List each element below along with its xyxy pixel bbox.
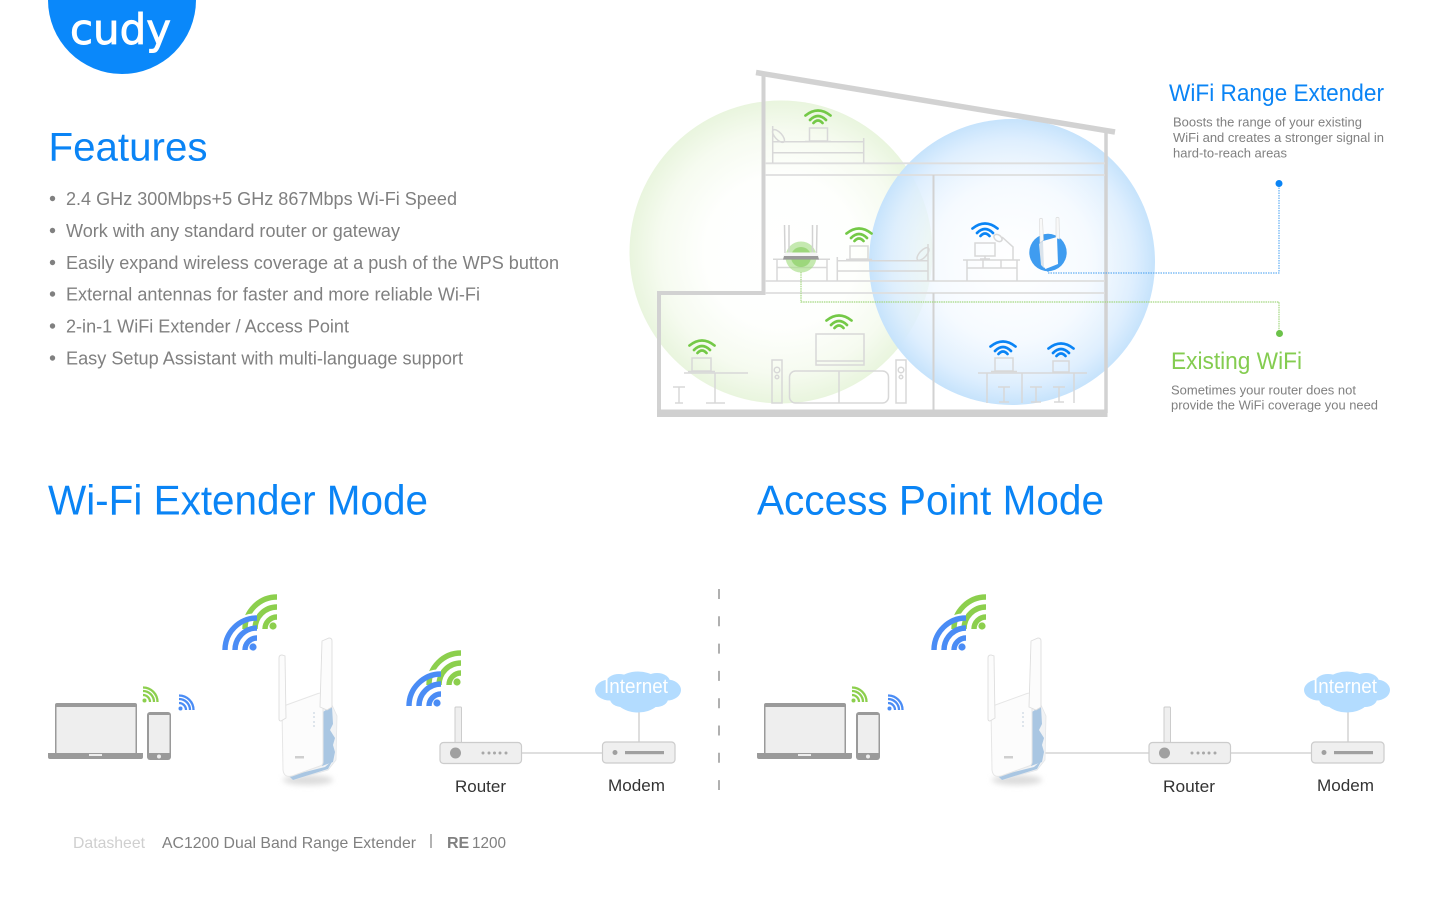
internet cloud: Internet <box>604 676 668 698</box>
lower-right tables and laptops <box>978 358 1087 403</box>
feature list: Easily expand wireless coverage at a push of the WPS button <box>66 252 559 273</box>
connector: router to label <box>801 272 1279 333</box>
router <box>1149 707 1230 764</box>
feature list: Easy Setup Assistant with multi-language support <box>66 348 463 368</box>
callout: WiFi Range Extender: hard-to-reach areas <box>1173 146 1287 160</box>
study desk with monitor and lamp <box>963 233 1020 281</box>
feature list <box>50 188 559 368</box>
callout: Existing WiFi: provide the WiFi coverage you need <box>1171 398 1378 412</box>
callout: Existing WiFi: Sometimes your router does not <box>1171 382 1356 398</box>
callout: Existing WiFi <box>1171 348 1378 412</box>
router on desk with green signal <box>783 225 819 272</box>
feature list: 2-in-1 WiFi Extender / Access Point <box>66 316 349 336</box>
internet cloud <box>1304 672 1390 712</box>
diagram: access point mode <box>757 597 1390 796</box>
logo: cudy <box>48 0 196 74</box>
label: Modem: Modem <box>1317 776 1374 795</box>
footer: Datasheet <box>73 835 146 852</box>
footer: AC1200 Dual Band Range Extender <box>162 835 417 852</box>
feature list: 2.4 GHz 300Mbps+5 GHz 867Mbps Wi-Fi Speed <box>66 188 457 209</box>
extender device <box>279 638 337 785</box>
label: Modem: Modem <box>608 776 665 795</box>
label: Router: Router <box>1163 777 1215 796</box>
heading: Wi-Fi Extender Mode: Wi-Fi Extender Mode <box>48 476 428 524</box>
client devices <box>757 688 902 760</box>
access point device <box>988 638 1046 785</box>
logo: cudy: cudy <box>70 5 171 54</box>
feature list: Work with any standard router or gateway <box>66 220 401 241</box>
internet cloud <box>595 672 681 712</box>
modem <box>602 710 675 763</box>
callout: WiFi Range Extender <box>1169 80 1384 160</box>
footer: 1200 <box>472 835 506 852</box>
wifi icon: study <box>972 224 998 236</box>
wifi icon: lower right one <box>990 342 1016 354</box>
callout: WiFi Range Extender: Boosts the range of your existing <box>1173 114 1362 130</box>
internet cloud: Internet <box>1313 676 1377 698</box>
extender coverage circle <box>869 119 1155 405</box>
middle bed and laptop <box>837 244 931 281</box>
connector: extender to label <box>1048 184 1279 273</box>
diagram: extender mode <box>48 597 681 796</box>
router desk <box>773 259 830 281</box>
house structure <box>657 72 1115 417</box>
heading: Access Point Mode: Access Point Mode <box>757 476 1104 524</box>
label: Router: Router <box>455 777 506 796</box>
footer: RE <box>447 835 470 852</box>
modem <box>1312 710 1384 763</box>
wifi icon: lower left <box>690 340 714 353</box>
feature list: External antennas for faster and more reliable Wi-Fi <box>66 284 480 304</box>
footer <box>73 834 506 852</box>
callout: WiFi Range Extender: WiFi Range Extender <box>1169 80 1384 107</box>
wifi icon: lower right two <box>1048 344 1074 356</box>
wifi icon: TV <box>826 316 852 328</box>
extender with blue signal <box>1029 217 1067 271</box>
divider between modes <box>718 589 720 790</box>
router <box>440 707 522 764</box>
lower-left table and laptop <box>673 358 748 403</box>
wifi icon: router bands <box>406 653 461 707</box>
existing WiFi coverage circle <box>630 100 932 404</box>
extender to router cable <box>1040 752 1312 754</box>
wifi icon: top bedroom <box>806 110 830 123</box>
top bedroom furniture <box>771 126 864 163</box>
wifi icon: access point bands <box>930 597 986 651</box>
callout: Existing WiFi: Existing WiFi <box>1171 348 1302 375</box>
dot: existing WiFi label <box>1276 330 1283 337</box>
wifi icon: extender bands <box>222 597 277 651</box>
wifi icon: middle bedroom <box>846 228 872 241</box>
heading: Features: Features <box>48 126 208 170</box>
router to modem cable <box>521 752 603 754</box>
living room TV and sofa <box>772 334 906 403</box>
client devices <box>48 688 194 760</box>
callout: WiFi Range Extender: WiFi and creates a stronger signal in <box>1173 130 1384 145</box>
house coverage diagram <box>630 72 1283 417</box>
dot: extender label <box>1276 180 1282 187</box>
